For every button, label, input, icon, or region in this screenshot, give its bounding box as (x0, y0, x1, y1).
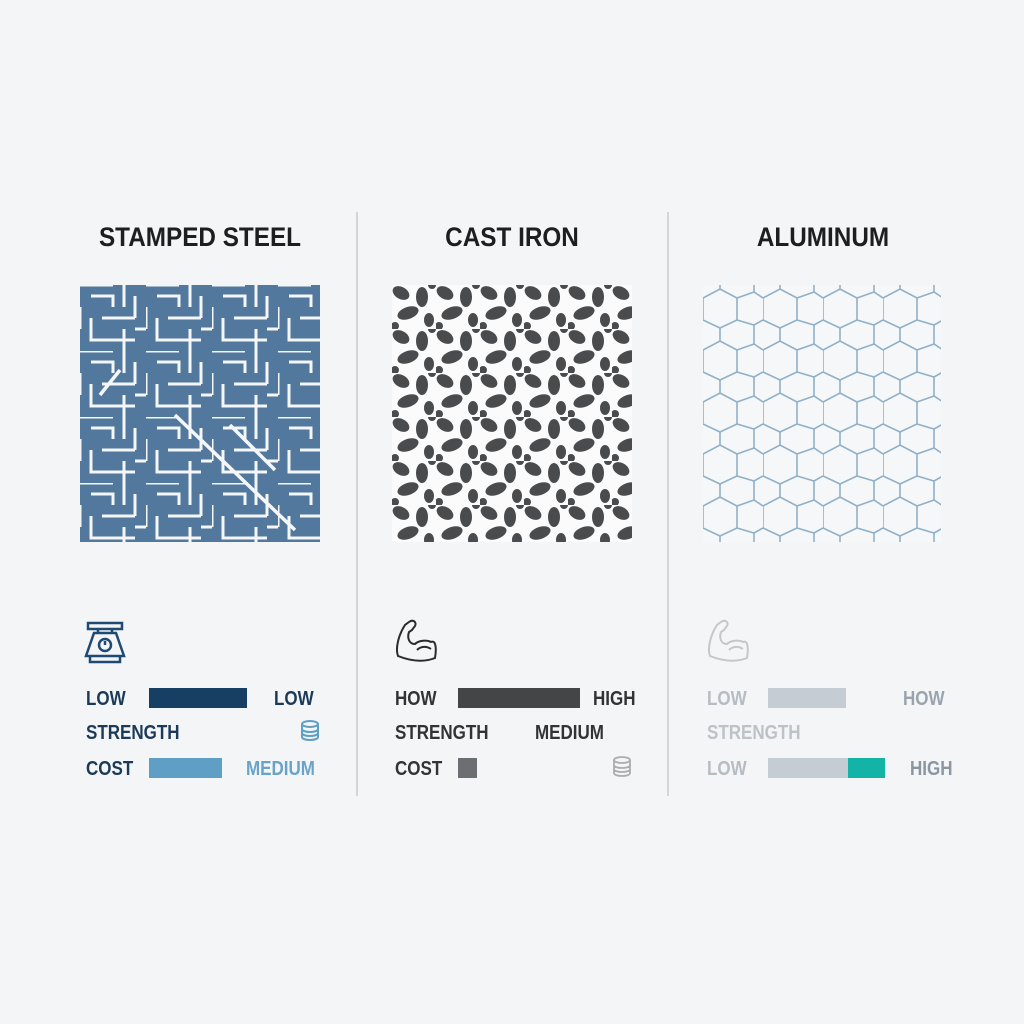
panel 2 stats (395, 620, 636, 780)
icon: bicep faded (708, 620, 749, 662)
text: LOW (707, 688, 747, 710)
text: COST (395, 758, 442, 780)
texture: maze steel (80, 285, 320, 542)
icon: coins (301, 720, 319, 741)
icon: scale (84, 622, 126, 664)
text: COST (86, 758, 133, 780)
text: LOW (707, 758, 747, 780)
text: HOW (395, 688, 437, 710)
text: HIGH (593, 688, 636, 710)
texture: aluminum grains (703, 285, 941, 542)
icon: bicep (396, 620, 437, 662)
text: MEDIUM (535, 722, 604, 744)
text: HOW (903, 688, 945, 710)
title: stamped steel: STAMPED STEEL (99, 222, 301, 252)
text: STRENGTH (395, 722, 488, 744)
text: STRENGTH (707, 722, 800, 744)
icon: coins gray (613, 756, 631, 777)
text: LOW (274, 688, 314, 710)
text: MEDIUM (246, 758, 315, 780)
text: HIGH (910, 758, 952, 780)
title: cast iron: CAST IRON (445, 222, 579, 252)
panel 3 stats (707, 620, 952, 780)
text: LOW (86, 688, 126, 710)
text: STRENGTH (86, 722, 180, 744)
texture: cast iron blobs (392, 285, 632, 542)
title: aluminum: ALUMINUM (757, 222, 889, 252)
panel 1 stats (84, 622, 319, 780)
